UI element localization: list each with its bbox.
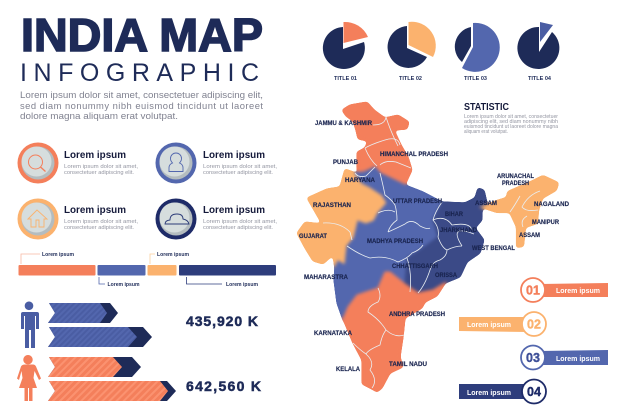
map labels: NAGALAND [534,202,570,208]
map labels: PRADESH [502,181,529,187]
text: item 3 [64,204,139,231]
map labels: ASSAM [519,233,540,239]
stat: female number: 642,560 K [186,378,261,394]
ribbon 04 [459,380,546,404]
ribbon 04: 04 [527,385,541,399]
ribbon 03 [521,346,608,370]
text: item 4: consectetuer adipiscing elit. [203,225,273,231]
icon: male figure [21,302,39,348]
panel: icon items [18,142,278,240]
text: item 2: consectetuer adipiscing elit. [203,170,273,176]
text: item 2: Lorem ipsum dolor sit amet, [203,164,278,170]
map regions with rounded silhouette [297,102,558,392]
pie chart 2 [388,22,436,82]
pie chart 3: TITLE 03 [464,76,488,82]
text: item 1: Lorem ipsum dolor sit amet, [64,164,139,170]
map labels: MADHYA PRADESH [367,239,423,245]
ribbon 04: Lorem ipsum [467,388,511,397]
pie chart 1 [323,22,368,82]
ribbon 02: 02 [527,318,541,332]
text: item 3: Lorem ipsum [64,204,126,216]
title [20,9,263,87]
ribbon 02: Lorem ipsum [467,320,511,329]
map labels: WEST BENGAL [472,246,515,252]
map labels: BIHAR [445,212,464,218]
map labels: HARYANA [345,178,376,184]
callout: blue segment: Lorem ipsum [108,282,140,288]
statistic text block: Lorem ipsum dolor sit amet, consectetuer [464,114,558,120]
intro text block: Lorem ipsum dolor sit amet, consectetuer adipiscing elit, [20,89,263,100]
map labels: JHARKHAND [440,228,478,234]
callout: navy segment [186,277,258,288]
icon: cloud badge [156,198,196,240]
pie chart 4: TITLE 04 [528,76,552,82]
callout: tan segment [150,252,189,264]
panel: pie charts [323,22,559,82]
map labels: MANIPUR [532,220,560,226]
icon: house badge [18,198,58,240]
map labels: CHHATTISGARH [392,264,438,270]
pie chart 4 [517,22,559,82]
ribbon 01 [521,278,608,302]
ribbon 01: Lorem ipsum [556,286,600,295]
india map [297,102,570,392]
map labels: ORISSA [435,273,458,279]
arrow chart: female [48,357,176,401]
text: item 2 [203,149,278,176]
text: item 1 [64,149,139,176]
text: item 4: Lorem ipsum dolor sit amet, [203,219,278,225]
intro text block [20,89,263,121]
title: INDIA MAP [21,9,263,61]
text: item 4 [203,204,278,231]
map labels: MAHARASTRA [304,275,349,281]
callout: blue segment [99,277,140,288]
map labels [299,121,570,373]
ribbon 01: 01 [526,284,540,298]
icon: person badge [156,142,196,184]
icon: magnifier badge [18,142,58,184]
statistic text block: aliquam erat volutpat. [464,129,508,135]
pie chart 1: TITLE 01 [334,76,358,82]
statistic text block: adipiscing elit, sed diam nonummy nibh [464,119,558,125]
map labels: GUJARAT [299,234,327,240]
map labels: TAMIL NADU [389,362,427,368]
ribbon 03: Lorem ipsum [556,354,600,363]
arrow chart: male [48,303,152,347]
icon: female figure [17,355,41,401]
map labels: KARNATAKA [314,331,353,337]
segmented bar chart [18,252,276,288]
intro text block: sed diam nonummy nibh euismod tincidunt ut laoreet [20,100,263,111]
intro text block: dolore magna aliquam erat volutpat. [20,110,178,121]
ribbon 03: 03 [526,351,540,365]
statistic text block: euismod tincidunt ut laoreet dolore magna [464,124,558,130]
text: item 2: Lorem ipsum [203,149,265,161]
text: item 1: consectetuer adipiscing elit. [64,170,134,176]
map labels: JAMMU & KASHMIR [315,121,373,127]
callout: tan segment: Lorem ipsum [157,252,189,258]
map labels: PUNJAB [333,160,359,166]
map labels: ASSAM [475,201,497,207]
statistic text block [464,102,558,135]
callout: orange segment [21,252,74,264]
map labels: ANDHRA PRADESH [389,312,445,318]
map: state borders [323,117,540,388]
map labels: ARUNACHAL [497,174,534,180]
text: item 4: Lorem ipsum [203,204,265,216]
text: item 1: Lorem ipsum [64,149,126,161]
title: INFOGRAPHIC [20,59,259,87]
panel: numbered ribbons [459,278,608,404]
callout: orange segment: Lorem ipsum [42,252,74,258]
map labels: KELALA [336,367,361,373]
stat: male number: 435,920 K [186,313,258,329]
map labels: UTTAR PRADESH [393,199,442,205]
text: item 3: consectetuer adipiscing elit. [64,225,134,231]
statistic text block: STATISTIC [464,102,509,113]
map labels: HIMANCHAL PRADESH [380,152,448,158]
pie chart 2: TITLE 02 [399,76,422,82]
callout: navy segment: Lorem ipsum [226,282,258,288]
text: item 3: Lorem ipsum dolor sit amet, [64,219,139,225]
map labels: RAJASTHAN [313,203,351,209]
pie chart 3 [455,23,500,82]
ribbon 02 [459,312,546,336]
